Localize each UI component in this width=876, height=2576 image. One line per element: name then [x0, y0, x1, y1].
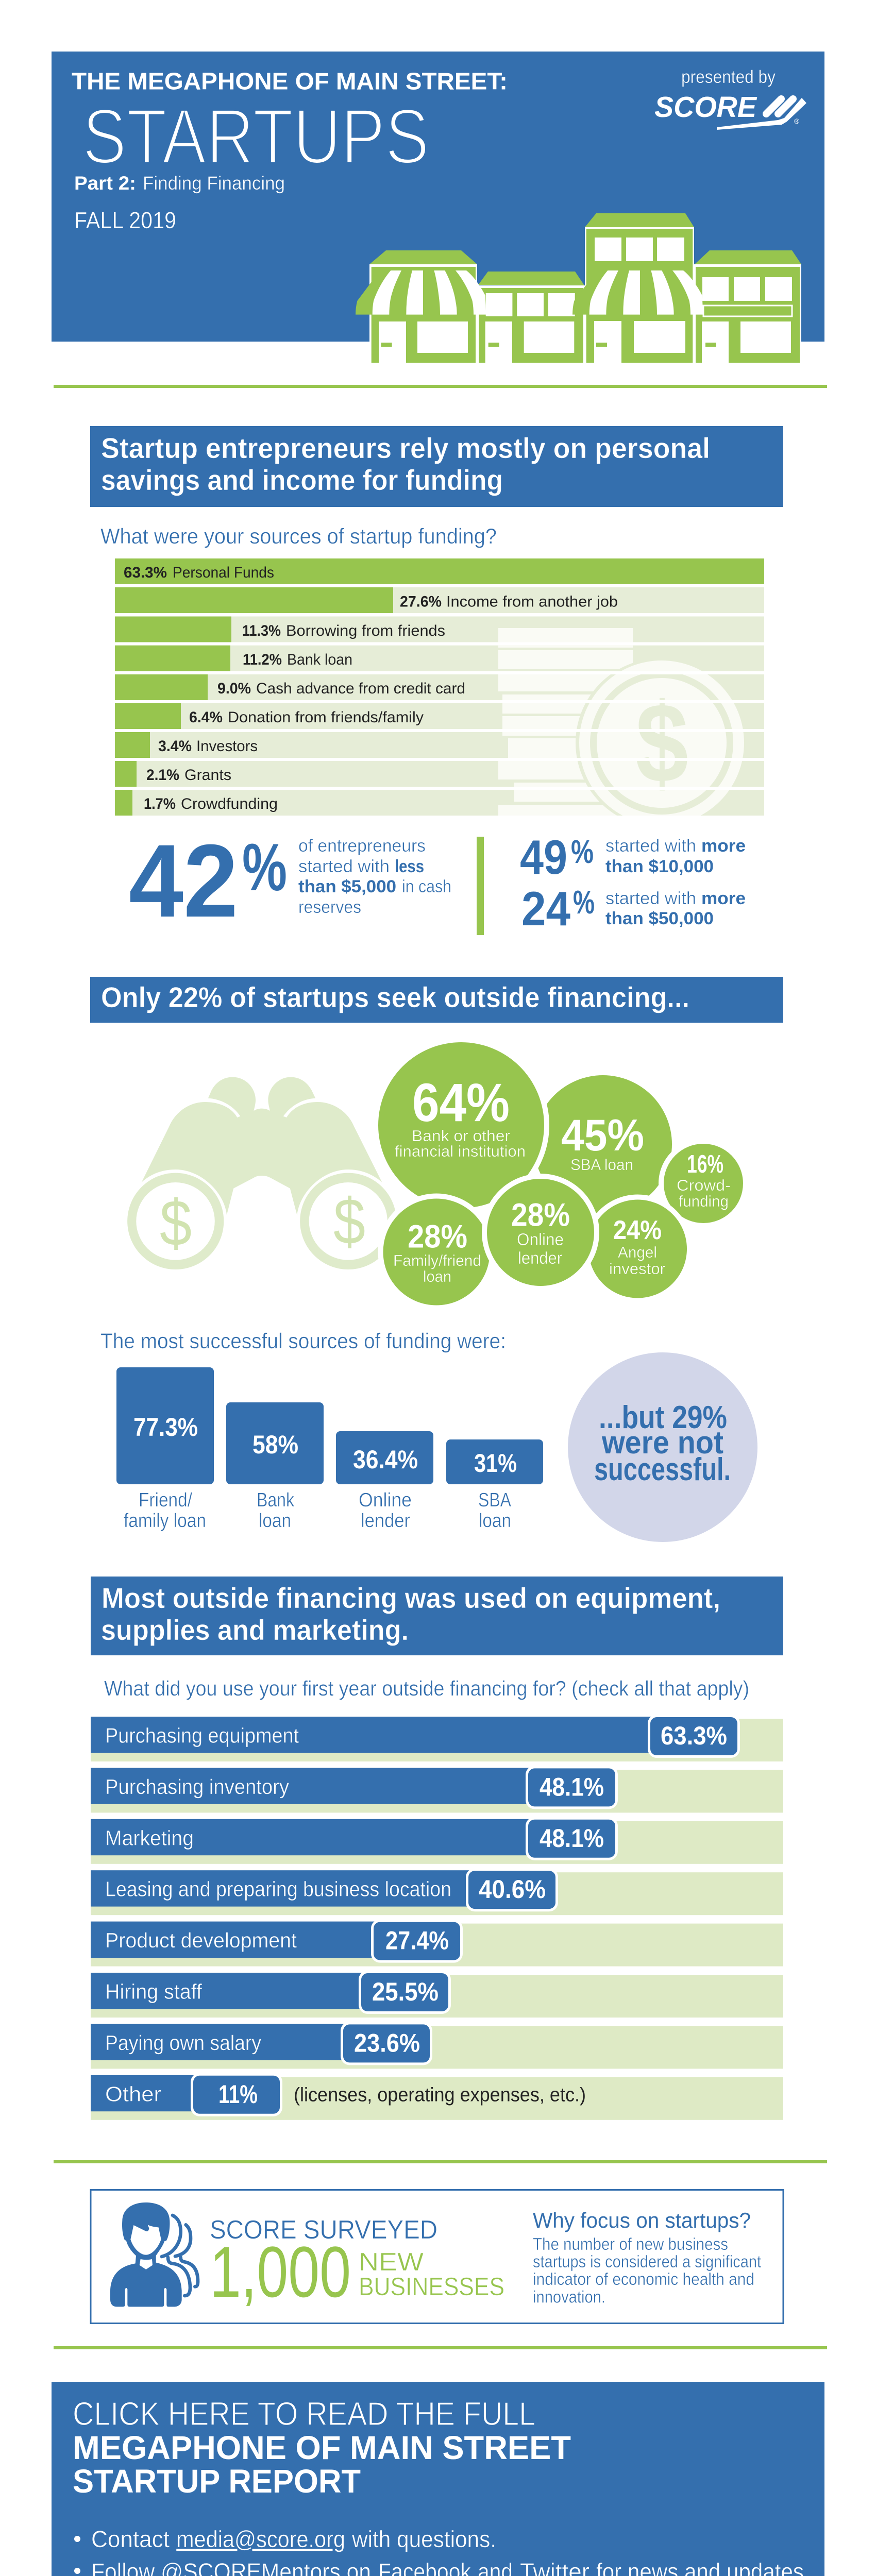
subtitle [74, 173, 285, 194]
bubble: 24 percent angel investor: investor [609, 1260, 665, 1278]
bar labels: 2.1% [146, 767, 179, 784]
bar: marketing [91, 1818, 783, 1864]
bar labels: Crowdfunding [181, 795, 278, 812]
bar: paying own salary: 23.6% [354, 2028, 420, 2057]
bubble: 28 percent online lender: lender [518, 1248, 562, 1267]
bar labels: 6.4% [189, 709, 223, 726]
bar labels: Cash advance from credit card [256, 680, 465, 697]
bullet: contact: media@score.org [176, 2526, 345, 2552]
bar: purchasing inventory: 48.1% [540, 1772, 604, 1801]
bubble: 16 percent crowdfunding: funding [679, 1192, 729, 1210]
callout: 29 percent not successful: were not [601, 1425, 723, 1461]
call to action panel [52, 2382, 824, 2576]
bar: purchasing inventory [91, 1767, 783, 1812]
stat: 42 percent: started with [298, 857, 390, 876]
section 2 heading: Only 22% of startups seek outside financing... [101, 981, 689, 1013]
bar labels [124, 564, 618, 812]
stat: 42 percent [129, 823, 451, 939]
bar: bank loan [226, 1402, 324, 1532]
bubble: 16 percent crowdfunding: 16% [687, 1150, 723, 1178]
presented by SCORE logo: presented by [681, 67, 776, 87]
presented by SCORE logo: SCORE [654, 91, 757, 124]
bar: product development: Product development [105, 1928, 297, 1952]
bar: purchasing inventory: Purchasing inventory [105, 1775, 289, 1799]
bubble: 28 percent family/friend: Family/friend [393, 1251, 481, 1269]
section 3 heading: Most outside financing was used on equipment, [102, 1582, 720, 1614]
survey callout box [91, 2190, 783, 2324]
survey headline [210, 2215, 504, 2312]
bar: hiring staff: 25.5% [372, 1977, 439, 2006]
why focus on startups: Why focus on startups? [533, 2208, 751, 2232]
bar: leasing and preparing location: 40.6% [479, 1875, 546, 1904]
bubble: 64 percent bank: financial institution [395, 1142, 526, 1160]
eyebrow title: THE MEGAPHONE OF MAIN STREET: [72, 68, 508, 95]
why focus on startups [533, 2208, 761, 2306]
bar labels: Bank loan [287, 651, 352, 668]
icon: binoculars with dollar signs: $ [160, 1187, 192, 1259]
bar: bank loan: 58% [252, 1430, 298, 1459]
stat: 42 percent: reserves [298, 897, 361, 917]
coin stack watermark [498, 628, 745, 827]
bullet: contact [74, 2526, 496, 2552]
successful sources heading: The most successful sources of funding were: [100, 1329, 506, 1353]
funding sources bar chart [115, 558, 764, 827]
use of financing bar chart [91, 1716, 783, 2120]
bar: online lender: 36.4% [353, 1445, 418, 1474]
bar: SBA loan [446, 1439, 543, 1532]
section 1 heading [90, 426, 783, 507]
bar: other [91, 2074, 783, 2120]
why focus on startups: startups is considered a significant [533, 2252, 761, 2271]
bar: product development [91, 1921, 783, 1967]
bar: other: (licenses, operating expenses, etc.) [294, 2084, 586, 2106]
survey headline: SCORE SURVEYED [210, 2215, 437, 2244]
bar: friend/family loan: 77.3% [133, 1413, 198, 1442]
building 4 [694, 250, 801, 363]
bar: purchasing equipment: 63.3% [661, 1721, 727, 1750]
presented by SCORE logo [654, 67, 806, 130]
bar labels: 3.4% [158, 738, 192, 755]
bar: purchasing equipment [91, 1716, 783, 1761]
bar labels: Donation from friends/family [228, 709, 424, 726]
bullet: follow [74, 2558, 804, 2576]
stat: 49 percent [520, 830, 746, 884]
survey headline: BUSINESSES [359, 2273, 504, 2301]
bullet: contact: with questions. [351, 2526, 496, 2552]
section 1 heading: Startup entrepreneurs rely mostly on personal [101, 432, 710, 464]
stat: 24 percent: 24 [521, 882, 570, 936]
bar labels: 27.6% [400, 594, 442, 610]
date: FALL 2019 [74, 207, 176, 233]
stat: 42 percent: % [242, 829, 287, 905]
bubble: 16 percent crowdfunding [664, 1144, 743, 1223]
bar labels: 11.2% [243, 651, 282, 668]
stat: 49 percent: more [701, 836, 746, 856]
main title: STARTUPS [82, 93, 429, 180]
header banner [52, 52, 824, 363]
awning 1 [356, 270, 486, 315]
subtitle: Part 2: [74, 173, 136, 194]
bubble: 28 percent family/friend: loan [423, 1267, 451, 1285]
stat: 49 percent: % [571, 833, 594, 870]
bar: other: 11% [218, 2080, 258, 2109]
stat: 42 percent: 42 [129, 823, 238, 939]
bar labels: Personal Funds [173, 564, 274, 581]
bar: SBA loan: SBA [478, 1489, 512, 1511]
bullet: contact: Contact [91, 2526, 170, 2552]
coin stack watermark: $ [635, 680, 688, 806]
stat: 49 percent: started with [605, 836, 696, 856]
report heading: STARTUP REPORT [73, 2463, 361, 2500]
why focus on startups: The number of new business [533, 2234, 728, 2253]
building 1 [369, 250, 477, 363]
bar: online lender: Online [359, 1489, 412, 1511]
stat: 24 percent: more [701, 889, 746, 908]
bubble: 24 percent angel investor [588, 1199, 687, 1298]
stat: 24 percent [521, 882, 746, 936]
callout: 29 percent not successful [568, 1352, 757, 1542]
bar: product development: 27.4% [385, 1926, 449, 1955]
bubble: 28 percent family/friend: 28% [408, 1219, 467, 1255]
bubble: 64 percent bank: 64% [412, 1073, 510, 1133]
section 3 heading [91, 1577, 783, 1655]
bar: SBA loan: 31% [474, 1449, 517, 1478]
stat: 42 percent: than $5,000 [298, 877, 396, 896]
bar: purchasing equipment: Purchasing equipment [105, 1724, 299, 1748]
bar labels: 63.3% [124, 564, 167, 581]
stat: 42 percent: less [395, 857, 424, 876]
stat: 49 percent: 49 [520, 830, 567, 884]
section 1 heading: savings and income for funding [101, 464, 503, 496]
report heading: CLICK HERE TO READ THE FULL [73, 2395, 535, 2432]
bar: leasing and preparing location [91, 1870, 783, 1915]
subtitle: Finding Financing [143, 173, 285, 194]
green value bars [115, 587, 393, 816]
section 3 heading: supplies and marketing. [101, 1614, 409, 1646]
bar labels: 11.3% [242, 622, 281, 639]
survey headline: NEW [359, 2248, 424, 2276]
why focus on startups: innovation. [533, 2287, 605, 2306]
bar: friend/family loan: Friend/ [139, 1489, 192, 1511]
report heading: MEGAPHONE OF MAIN STREET [73, 2429, 571, 2466]
icon: binoculars with dollar signs: $ [333, 1185, 365, 1258]
icon: binoculars with dollar signs [127, 1077, 396, 1269]
bar: paying own salary: Paying own salary [105, 2031, 261, 2055]
stat: 42 percent: of entrepreneurs [298, 836, 426, 856]
bubble: 16 percent crowdfunding: Crowd- [677, 1176, 731, 1194]
stat: 49 percent: than $10,000 [605, 857, 714, 876]
why focus on startups: indicator of economic health and [533, 2269, 754, 2289]
bubble: 45 percent SBA loan: SBA loan [570, 1156, 633, 1174]
bubble: 28 percent online lender: 28% [511, 1197, 570, 1233]
bar: hiring staff [91, 1972, 783, 2018]
bubble chart: outside financing sources [378, 1042, 743, 1306]
bar: friend/family loan: family loan [124, 1510, 206, 1532]
bar: friend/family loan [116, 1367, 214, 1532]
funding question: What were your sources of startup funding? [100, 524, 497, 548]
bar labels: Income from another job [446, 594, 618, 610]
building 3 [585, 213, 694, 363]
stat: 24 percent: than $50,000 [605, 909, 714, 928]
bar labels: Grants [184, 767, 231, 784]
stat: 24 percent: started with [605, 889, 696, 908]
successful sources bar chart [116, 1367, 543, 1532]
bubble: 45 percent SBA loan [534, 1075, 672, 1213]
bubble: 64 percent bank [378, 1042, 544, 1208]
bubble: 24 percent angel investor: 24% [613, 1215, 662, 1245]
bar: hiring staff: Hiring staff [105, 1979, 203, 2003]
bar: online lender [336, 1431, 433, 1532]
report heading [73, 2395, 571, 2500]
icon: person with motion lines [110, 2202, 198, 2307]
bar labels: 1.7% [144, 795, 176, 812]
callout: 29 percent not successful: ...but 29% [599, 1400, 727, 1435]
bubble: 64 percent bank: Bank or other [412, 1127, 510, 1145]
bar: online lender: lender [361, 1510, 410, 1532]
bubble: 28 percent family/friend [383, 1198, 490, 1306]
presented by SCORE logo: ® [794, 117, 800, 125]
stat: 42 percent: in cash [402, 877, 451, 896]
use of financing question: What did you use your first year outside financing for? (check all that apply) [104, 1676, 749, 1700]
bar labels: Investors [196, 738, 258, 755]
bar: paying own salary [91, 2023, 783, 2069]
bar: marketing: Marketing [105, 1826, 194, 1850]
survey headline: 1,000 [210, 2231, 351, 2312]
building 2 [477, 272, 585, 363]
bar labels: 9.0% [217, 680, 251, 697]
bar labels: Borrowing from friends [286, 622, 445, 639]
bar: other: Other [105, 2082, 161, 2106]
bar: bank loan: Bank [257, 1489, 295, 1511]
bubble: 24 percent angel investor: Angel [618, 1243, 657, 1261]
storefronts illustration [356, 213, 801, 363]
bubble: 45 percent SBA loan: 45% [561, 1111, 644, 1160]
bar: bank loan: loan [259, 1510, 291, 1532]
awning 2 [572, 270, 703, 315]
callout: 29 percent not successful: successful. [594, 1452, 731, 1487]
bubble: 28 percent online lender [487, 1179, 594, 1286]
bar: leasing and preparing location: Leasing and preparing business location [105, 1877, 451, 1901]
bubble: 28 percent online lender: Online [517, 1230, 564, 1249]
bar: SBA loan: loan [479, 1510, 511, 1532]
section 2 heading [90, 977, 783, 1023]
bar: marketing: 48.1% [540, 1824, 604, 1853]
stat: 24 percent: % [573, 884, 595, 921]
